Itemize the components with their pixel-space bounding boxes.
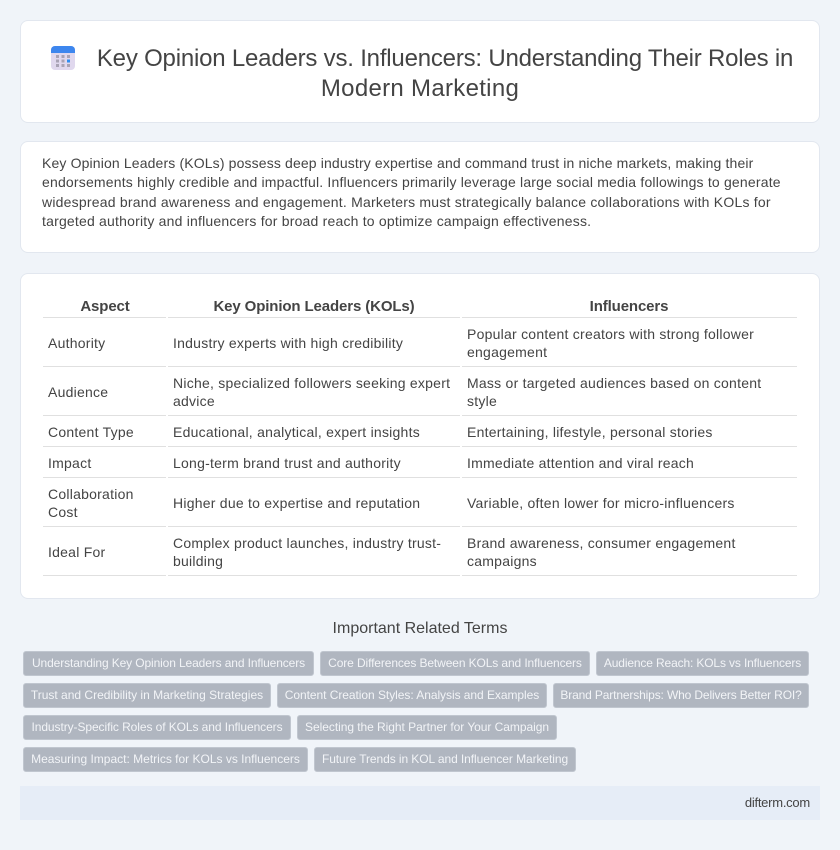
heading: related terms: Important Related Terms xyxy=(333,620,507,637)
comparison table: Complex product launches, industry trust- xyxy=(173,535,441,551)
comparison table: campaigns xyxy=(467,553,537,569)
icon: calendar xyxy=(51,46,75,70)
related terms tags xyxy=(23,651,809,772)
related terms tags: Trust and Credibility in Marketing Strategies xyxy=(31,688,263,702)
related terms tags: Audience Reach: KOLs vs Influencers xyxy=(604,656,801,670)
comparison table: Entertaining, lifestyle, personal stories xyxy=(467,424,713,440)
comparison table: Variable, often lower for micro-influencers xyxy=(467,495,735,511)
comparison table: Educational, analytical, expert insights xyxy=(173,424,420,440)
comparison table: Industry experts with high credibility xyxy=(173,335,403,351)
comparison table: Audience xyxy=(48,384,108,400)
title xyxy=(97,45,793,102)
comparison table: Popular content creators with strong follower xyxy=(467,326,754,342)
title: Key Opinion Leaders vs. Influencers: Understanding Their Roles in xyxy=(97,45,793,72)
comparison table: Key Opinion Leaders (KOLs) xyxy=(213,298,415,315)
related terms tags: Industry-Specific Roles of KOLs and Influencers xyxy=(31,720,283,734)
footer bar xyxy=(20,786,820,820)
comparison table: Influencers xyxy=(590,298,668,315)
comparison table: Niche, specialized followers seeking expert xyxy=(173,375,450,391)
comparison table: building xyxy=(173,553,223,569)
comparison table: Ideal For xyxy=(48,544,105,560)
comparison table: engagement xyxy=(467,344,547,360)
title: Modern Marketing xyxy=(321,75,519,102)
comparison table: Impact xyxy=(48,455,91,471)
summary text: Key Opinion Leaders (KOLs) possess deep industry expertise and command trust in niche markets, making their xyxy=(42,155,753,171)
comparison table: Authority xyxy=(48,335,105,351)
comparison table: Brand awareness, consumer engagement xyxy=(467,535,736,551)
comparison table: advice xyxy=(173,393,215,409)
related terms tags: Understanding Key Opinion Leaders and Influencers xyxy=(32,656,305,670)
footer brand: difterm.com xyxy=(745,795,810,810)
related terms tags: Core Differences Between KOLs and Influencers xyxy=(328,656,582,670)
summary text xyxy=(42,155,781,229)
comparison table: Higher due to expertise and reputation xyxy=(173,495,420,511)
comparison table: Long-term brand trust and authority xyxy=(173,455,401,471)
panel: summary card xyxy=(20,141,820,253)
related terms tags: Selecting the Right Partner for Your Campaign xyxy=(305,720,549,734)
comparison table: Mass or targeted audiences based on content xyxy=(467,375,761,391)
comparison table: style xyxy=(467,393,497,409)
summary text: targeted authority and influencers for broad reach to optimize campaign effectiveness. xyxy=(42,213,591,229)
comparison table: Aspect xyxy=(80,298,130,315)
comparison table: Content Type xyxy=(48,424,134,440)
related terms tags: Content Creation Styles: Analysis and Examples xyxy=(285,688,539,702)
comparison table: Cost xyxy=(48,504,78,520)
summary text: widespread brand awareness and engagement. Marketers must strategically balance collaborations with KOLs for xyxy=(42,194,771,210)
related terms tags: Future Trends in KOL and Influencer Marketing xyxy=(322,752,568,766)
panel: title card xyxy=(20,20,820,123)
comparison table: Collaboration xyxy=(48,486,134,502)
comparison table: Immediate attention and viral reach xyxy=(467,455,694,471)
related terms tags: Measuring Impact: Metrics for KOLs vs Influencers xyxy=(31,752,300,766)
related terms tags: Brand Partnerships: Who Delivers Better ROI? xyxy=(560,688,802,702)
comparison table xyxy=(43,298,797,576)
summary text: endorsements highly credible and impactful. Influencers primarily leverage large social media followings to generate xyxy=(42,174,781,190)
panel: comparison table card xyxy=(20,273,820,599)
